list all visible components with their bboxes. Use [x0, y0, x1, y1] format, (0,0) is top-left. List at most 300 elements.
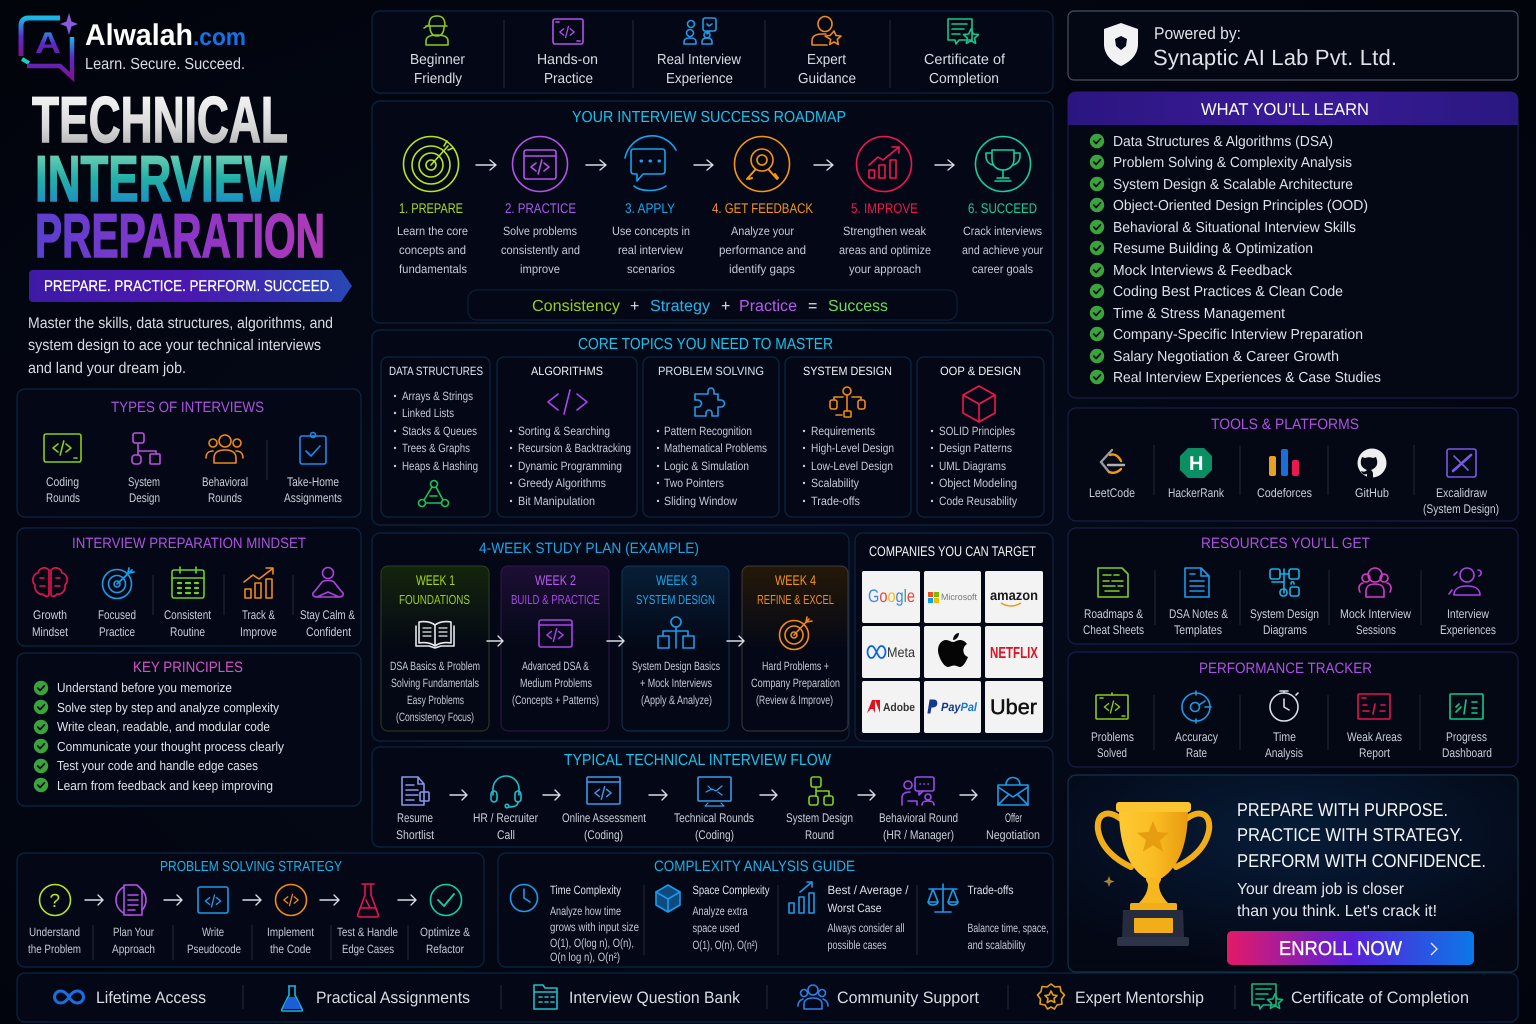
metric: accuracy rate: Accuracy [1175, 730, 1219, 744]
checklist: what you'll learn: Problem Solving & Complexity Analysis [1113, 155, 1352, 171]
logo: microsoft [924, 571, 981, 623]
card: week 2: (Concepts + Patterns) [512, 693, 599, 707]
item: focused practice: Focused [98, 608, 136, 622]
step: technical rounds: Technical Rounds [674, 811, 754, 825]
card: problem solving [643, 357, 779, 517]
icon: cube [963, 386, 995, 422]
resource: interview experiences: Experiences [1440, 623, 1496, 637]
logo: uber [985, 681, 1043, 733]
icon: target [780, 617, 812, 650]
card: week 2: Advanced DSA & [522, 659, 589, 673]
card: system design: High-Level Design [811, 441, 894, 455]
card: oop and design: Design Patterns [939, 441, 1012, 455]
card: week 2: Medium Problems [520, 676, 592, 690]
intro paragraph: and land your dream job. [28, 360, 186, 377]
intro paragraph [28, 315, 333, 377]
card: data structures: Stacks & Queues [402, 424, 477, 438]
card: week 3: (Apply & Analyze) [641, 693, 712, 707]
heading bar: WHAT YOU'LL LEARN [1201, 100, 1369, 119]
headline: PRACTICE WITH STRATEGY. [1237, 824, 1463, 845]
card: data structures: Linked Lists [402, 406, 454, 420]
tool: excalidraw: Excalidraw [1436, 486, 1488, 500]
card: week 1: Solving Fundamentals [391, 676, 479, 690]
formula pill: Practice [739, 298, 797, 315]
panel: powered by [1068, 11, 1518, 80]
icon: trophy [1098, 802, 1209, 946]
step: plan approach [112, 885, 155, 956]
heading: study plan: 4-WEEK STUDY PLAN (EXAMPLE) [479, 540, 699, 557]
item: best average worst case: Always consider all [828, 921, 904, 935]
checklist: key principles: Write clean, readable, and modular code [57, 719, 270, 734]
heading: performance: PERFORMANCE TRACKER [1199, 660, 1372, 677]
step: technical rounds: (Coding) [695, 828, 734, 842]
step 3: apply: 3. APPLY [625, 200, 676, 216]
step 1: prepare [397, 136, 468, 276]
step 5: improve [839, 136, 931, 276]
item: trade-offs: and scalability [968, 938, 1026, 952]
card: problem solving: Mathematical Problems [664, 441, 767, 455]
resource: roadmaps: Roadmaps & [1084, 607, 1144, 621]
icon: graph [418, 480, 448, 506]
tool: github [1355, 448, 1389, 500]
logo: google: Google [868, 586, 915, 606]
item: certificate of completion: Certificate of [924, 52, 1006, 68]
step 4: get feedback: Analyze your [731, 224, 794, 238]
card: week 3 [622, 566, 729, 731]
step 6: succeed: and achieve your [962, 243, 1043, 257]
checklist: key principles: Communicate your thought process clearly [57, 739, 284, 754]
tool: github: GitHub [1355, 486, 1389, 500]
card: week 1: (Consistency Focus) [396, 710, 474, 724]
step: online assessment [562, 777, 646, 842]
step: write pseudocode: Write [202, 925, 224, 939]
step 4: get feedback: 4. GET FEEDBACK [712, 200, 814, 216]
card: system design: Trade-offs [811, 494, 860, 508]
step 3: apply: scenarios [627, 262, 675, 276]
panel: tools and platforms [1068, 408, 1518, 521]
logo: netflix [985, 626, 1043, 678]
checklist: key principles [34, 680, 284, 793]
item: behavioral rounds [202, 435, 248, 505]
resource: dsa notes [1169, 568, 1229, 637]
headline: PREPARE WITH PURPOSE. [1237, 799, 1448, 820]
checklist: what you'll learn: Behavioral & Situational Interview Skills [1113, 220, 1356, 236]
logo: adobe [862, 681, 920, 733]
tool: excalidraw: (System Design) [1423, 502, 1499, 516]
card: week 3: WEEK 3 [656, 572, 697, 588]
card: oop and design: OOP & DESIGN [940, 364, 1021, 378]
logo: meta: Meta [887, 644, 915, 660]
checklist: what you'll learn: Object-Oriented Design Principles (OOD) [1113, 198, 1368, 214]
heading: strategy: PROBLEM SOLVING STRATEGY [160, 859, 342, 875]
resource: interview experiences: Interview [1447, 607, 1490, 621]
item: focused practice: Practice [99, 625, 135, 639]
text: powered by: Powered by: [1154, 24, 1241, 43]
feature: community support [798, 985, 979, 1009]
item: hands-on practice: Practice [544, 71, 593, 87]
arrows: interview flow [450, 790, 977, 800]
feature: community support: Community Support [837, 989, 979, 1007]
step 3: apply [612, 136, 690, 276]
feature: question bank [534, 985, 741, 1009]
step: recruiter call [473, 776, 538, 842]
card: system design: SYSTEM DESIGN [803, 364, 892, 378]
step 4: get feedback: identify gaps [729, 262, 795, 276]
item: time complexity: O(1), O(log n), O(n), [550, 936, 634, 950]
step: write pseudocode: Pseudocode [187, 942, 241, 956]
item: track and improve: Improve [240, 625, 277, 639]
logo [21, 13, 78, 77]
heading: complexity: COMPLEXITY ANALYSIS GUIDE [654, 858, 855, 875]
step: optimize: Refactor [426, 942, 464, 956]
step 5: improve: your approach [849, 262, 921, 276]
step: understand the problem [28, 884, 81, 956]
item: expert guidance: Guidance [798, 71, 856, 87]
metric: weak areas [1347, 694, 1402, 760]
card: week 4 [742, 566, 848, 731]
formula pill: + [721, 298, 730, 315]
card: oop and design: SOLID Principles [939, 424, 1015, 438]
resource: system design diagrams: System Design [1250, 607, 1319, 621]
item: best average worst case [789, 882, 909, 952]
checklist: key principles: Solve step by step and analyze complexity [57, 700, 279, 715]
logo: paypal: PayPal [941, 700, 978, 714]
item: time complexity: O(n log n), O(n²) [550, 950, 620, 964]
panel: study plan [372, 533, 849, 741]
item: time complexity: grows with input size [550, 920, 639, 934]
card: week 4: Hard Problems + [762, 659, 829, 673]
item: take-home assignments [284, 432, 342, 505]
checklist: what you'll learn: Salary Negotiation & Career Growth [1113, 349, 1339, 365]
item: expert guidance: Expert [807, 52, 846, 68]
item: certificate of completion: Completion [929, 71, 999, 87]
step 1: prepare: Learn the core [397, 224, 468, 238]
heading: interview flow: TYPICAL TECHNICAL INTERVIEW FLOW [564, 752, 832, 769]
checklist: what you'll learn: Resume Building & Optimization [1113, 241, 1313, 257]
arrows: strategy [85, 895, 416, 905]
item: track and improve [240, 568, 277, 639]
step 2: practice: 2. PRACTICE [505, 200, 576, 216]
checklist: what you'll learn: System Design & Scalable Architecture [1113, 177, 1353, 193]
text: lab name: Synaptic AI Lab Pvt. Ltd. [1153, 45, 1397, 70]
item: take-home assignments: Assignments [284, 491, 342, 505]
resource: dsa notes: DSA Notes & [1169, 607, 1229, 621]
heading: types of interviews: TYPES OF INTERVIEWS [111, 399, 264, 416]
item: consistent routine: Routine [170, 625, 205, 639]
card: data structures: Arrays & Strings [402, 389, 473, 403]
logo: netflix: NETFLIX [990, 645, 1038, 662]
step: resume shortlist [396, 777, 434, 842]
card: week 1: FOUNDATIONS [399, 592, 470, 607]
supporting text: than you think. Let's crack it! [1237, 903, 1437, 920]
item: beginner friendly: Beginner [410, 52, 465, 68]
card: week 1: WEEK 1 [416, 572, 455, 588]
step: implement code: the Code [270, 942, 311, 956]
tool: excalidraw [1423, 449, 1499, 516]
icon: book [416, 622, 454, 648]
panel: key principles [17, 653, 361, 806]
item: real interview experience: Real Interview [657, 52, 741, 68]
panel: interview flow [372, 747, 1053, 847]
step 6: succeed: Crack interviews [963, 224, 1042, 238]
step: test edge cases: Test & Handle [337, 925, 398, 939]
metric: accuracy rate: Rate [1186, 746, 1207, 760]
formula pill: = [808, 298, 817, 315]
step 1: prepare: 1. PREPARE [399, 200, 463, 216]
item: behavioral rounds: Rounds [208, 491, 242, 505]
panel: what you'll learn [1068, 92, 1518, 398]
item: best average worst case: possible cases [828, 938, 886, 952]
card: oop and design: Code Reusability [939, 494, 1017, 508]
arrows: study plan [487, 636, 744, 646]
tool: codeforces [1257, 449, 1312, 500]
checklist: what you'll learn [1090, 134, 1381, 386]
formula pill: Strategy [650, 298, 710, 315]
item: certificate of completion [924, 19, 1006, 87]
feature: lifetime access: Lifetime Access [96, 989, 206, 1007]
logo: meta [862, 626, 920, 678]
checklist: what you'll learn: Data Structures & Algorithms (DSA) [1113, 134, 1333, 150]
brand name: .com [193, 24, 246, 51]
step 5: improve: areas and optimize [839, 243, 931, 257]
feature: certificate [1252, 984, 1469, 1009]
metric: problems solved [1091, 693, 1134, 760]
step: optimize: Optimize & [420, 925, 470, 939]
button: enroll now [1227, 931, 1474, 965]
brand name [85, 19, 246, 73]
card: algorithms: Bit Manipulation [518, 494, 595, 508]
metric: accuracy rate [1175, 691, 1219, 760]
card: week 3: + Mock Interviews [640, 676, 712, 690]
heading: companies: COMPANIES YOU CAN TARGET [869, 543, 1036, 559]
brand name: Alwalah [85, 19, 193, 52]
step: offer negotiation: Negotiation [986, 828, 1040, 842]
logo: amazon: amazon [990, 587, 1038, 603]
item: consistent routine [164, 567, 211, 639]
item: coding rounds [44, 434, 81, 505]
tool: leetcode: LeetCode [1089, 486, 1135, 500]
resource: dsa notes: Templates [1174, 623, 1222, 637]
item: coding rounds: Rounds [46, 491, 80, 505]
item: growth mindset [32, 568, 68, 639]
metric: problems solved: Solved [1097, 746, 1127, 760]
step 2: practice: consistently and [501, 243, 580, 257]
tagline banner [29, 270, 352, 302]
step: system design round: Round [805, 828, 834, 842]
step: test edge cases: Edge Cases [342, 942, 394, 956]
item: take-home assignments: Take-Home [287, 475, 339, 489]
step: implement code [267, 884, 315, 956]
card: problem solving: PROBLEM SOLVING [658, 364, 764, 378]
item: space complexity [656, 883, 770, 952]
card: system design [785, 357, 911, 517]
card: algorithms: Greedy Algorithms [518, 476, 606, 490]
step 4: get feedback [712, 136, 814, 276]
step: understand the problem: Understand [29, 925, 80, 939]
tool: codeforces: Codeforces [1257, 486, 1312, 500]
resource: mock interviews: Mock Interview [1340, 607, 1412, 621]
step: online assessment: (Coding) [584, 828, 623, 842]
item: stay calm [300, 568, 356, 639]
step: behavioral round [879, 777, 958, 842]
logo: apple [924, 626, 981, 678]
metric: problems solved: Problems [1091, 730, 1134, 744]
metric: time analysis: Analysis [1265, 746, 1303, 760]
step 6: succeed: career goals [972, 262, 1033, 276]
card: algorithms: Recursion & Backtracking [518, 441, 631, 455]
step: test edge cases [337, 884, 398, 956]
title: INTERVIEW [35, 142, 287, 215]
item: consistent routine: Consistent [164, 608, 211, 622]
item: real interview experience [657, 18, 741, 87]
metric: weak areas: Report [1359, 746, 1390, 760]
title: TECHNICAL [32, 83, 288, 156]
step 4: get feedback: performance and [719, 243, 806, 257]
feature: certificate: Certificate of Completion [1291, 989, 1469, 1007]
heading bar [1068, 92, 1518, 125]
step: behavioral round: Behavioral Round [879, 811, 958, 825]
item: best average worst case: Worst Case [828, 901, 882, 915]
card: week 2: BUILD & PRACTICE [511, 592, 600, 607]
step: write pseudocode [187, 887, 241, 956]
metric: time analysis: Time [1273, 730, 1296, 744]
tool: leetcode [1089, 450, 1135, 500]
step 6: succeed [962, 136, 1043, 276]
metric: progress dashboard: Dashboard [1442, 746, 1492, 760]
card: week 2 [501, 566, 609, 731]
card: oop and design: Object Modeling [939, 476, 1017, 490]
item: track and improve: Track & [242, 608, 276, 622]
panel: types of interviews [17, 389, 361, 517]
card: oop and design: UML Diagrams [939, 459, 1006, 473]
item: space complexity: O(1), O(n), O(n²) [692, 938, 758, 952]
checklist: what you'll learn: Time & Stress Management [1113, 306, 1285, 322]
panel: complexity analysis [498, 853, 1053, 967]
resource: roadmaps: Cheat Sheets [1083, 623, 1144, 637]
resource: roadmaps [1083, 568, 1144, 637]
panel: core topics [372, 330, 1053, 525]
panel: call to action [1068, 775, 1518, 972]
item: real interview experience: Experience [666, 71, 733, 87]
logo: amazon [985, 571, 1043, 623]
metric: progress dashboard: Progress [1446, 730, 1487, 744]
icon: system diagram [658, 617, 694, 648]
formula pill [468, 290, 957, 320]
card: problem solving: Logic & Simulation [664, 459, 749, 473]
card: system design: Requirements [811, 424, 875, 438]
step 2: practice: Solve problems [503, 224, 577, 238]
tool: hackerrank: H [1189, 453, 1203, 475]
panel: course features [372, 11, 1053, 93]
card: system design: Scalability [811, 476, 859, 490]
card: system design: Low-Level Design [811, 459, 893, 473]
panel: success roadmap [372, 101, 1053, 323]
button: enroll now: ENROLL NOW [1279, 938, 1402, 960]
card: data structures: Heaps & Hashing [402, 459, 478, 473]
panel: resources [1068, 528, 1518, 644]
step: plan approach: Plan Your [113, 925, 154, 939]
step 1: prepare: concepts and [399, 243, 466, 257]
title: PREPARATION [35, 202, 325, 271]
panel: problem solving strategy [17, 853, 484, 967]
icon: code window [539, 620, 572, 647]
resource: interview experiences [1440, 568, 1496, 637]
step 5: improve: Strengthen weak [843, 224, 927, 238]
card: week 2: WEEK 2 [535, 572, 576, 588]
item: space complexity: Analyze extra [692, 904, 748, 918]
card: week 1 [381, 566, 489, 731]
panel: performance tracker [1068, 652, 1518, 767]
resource: mock interviews: Sessions [1356, 623, 1396, 637]
tagline banner: PREPARE. PRACTICE. PERFORM. SUCCEED. [44, 278, 333, 295]
card: data structures: DATA STRUCTURES [389, 364, 483, 378]
intro paragraph: Master the skills, data structures, algorithms, and [28, 315, 333, 332]
checklist: what you'll learn: Mock Interviews & Feedback [1113, 263, 1293, 279]
headline: PERFORM WITH CONFIDENCE. [1237, 850, 1486, 871]
panel: interview preparation mindset [17, 528, 361, 646]
heading: mindset: INTERVIEW PREPARATION MINDSET [72, 535, 306, 552]
icon: code brackets [548, 390, 587, 414]
heading: core topics: CORE TOPICS YOU NEED TO MASTER [578, 336, 833, 353]
step 3: apply: real interview [618, 243, 683, 257]
formula pill: + [630, 298, 639, 315]
card: data structures: Trees & Graphs [402, 441, 470, 455]
metric: time analysis [1265, 691, 1303, 760]
feature: expert mentorship: Expert Mentorship [1075, 989, 1204, 1007]
step 3: apply: Use concepts in [612, 224, 690, 238]
card: week 1: DSA Basics & Problem [390, 659, 480, 673]
logo: google [862, 571, 920, 623]
heading: roadmap: YOUR INTERVIEW SUCCESS ROADMAP [572, 109, 846, 126]
step: plan approach: Approach [112, 942, 155, 956]
arrows: roadmap [476, 160, 954, 170]
card: data structures [381, 357, 490, 517]
step: offer negotiation [986, 778, 1040, 842]
card: algorithms: Sorting & Searching [518, 424, 610, 438]
metric: progress dashboard [1442, 694, 1492, 760]
step 5: improve: 5. IMPROVE [851, 200, 918, 216]
item: beginner friendly [410, 16, 465, 87]
checklist: what you'll learn: Coding Best Practices & Clean Code [1113, 284, 1343, 300]
heading: key principles: KEY PRINCIPLES [133, 659, 243, 676]
formula pill: Success [828, 298, 888, 315]
tool: hackerrank: HackerRank [1168, 486, 1225, 500]
checklist: what you'll learn: Company-Specific Interview Preparation [1113, 327, 1363, 343]
card: algorithms: Dynamic Programming [518, 459, 622, 473]
card: problem solving: Two Pointers [664, 476, 724, 490]
item: space complexity: space used [692, 921, 740, 935]
item: coding rounds: Coding [46, 475, 79, 489]
step: understand the problem: the Problem [28, 942, 81, 956]
brand name: Learn. Secure. Succeed. [85, 56, 245, 73]
feature: practical assignments [282, 986, 470, 1011]
item: trade-offs [928, 883, 1048, 952]
feature: expert mentorship [1038, 984, 1204, 1009]
step: resume shortlist: Resume [397, 811, 433, 825]
item: time complexity: Time Complexity [550, 883, 621, 897]
icon: system nodes [830, 387, 865, 417]
card: week 4: Company Preparation [751, 676, 840, 690]
resource: mock interviews [1340, 568, 1412, 637]
step 2: practice: improve [520, 262, 560, 276]
item: stay calm: Stay Calm & [300, 608, 356, 622]
card: week 3: SYSTEM DESIGN [636, 592, 715, 607]
step 2: practice [501, 136, 580, 276]
item: time complexity [510, 883, 639, 964]
icon: puzzle [695, 388, 725, 416]
metric: weak areas: Weak Areas [1347, 730, 1402, 744]
step: system design round: System Design [786, 811, 853, 825]
